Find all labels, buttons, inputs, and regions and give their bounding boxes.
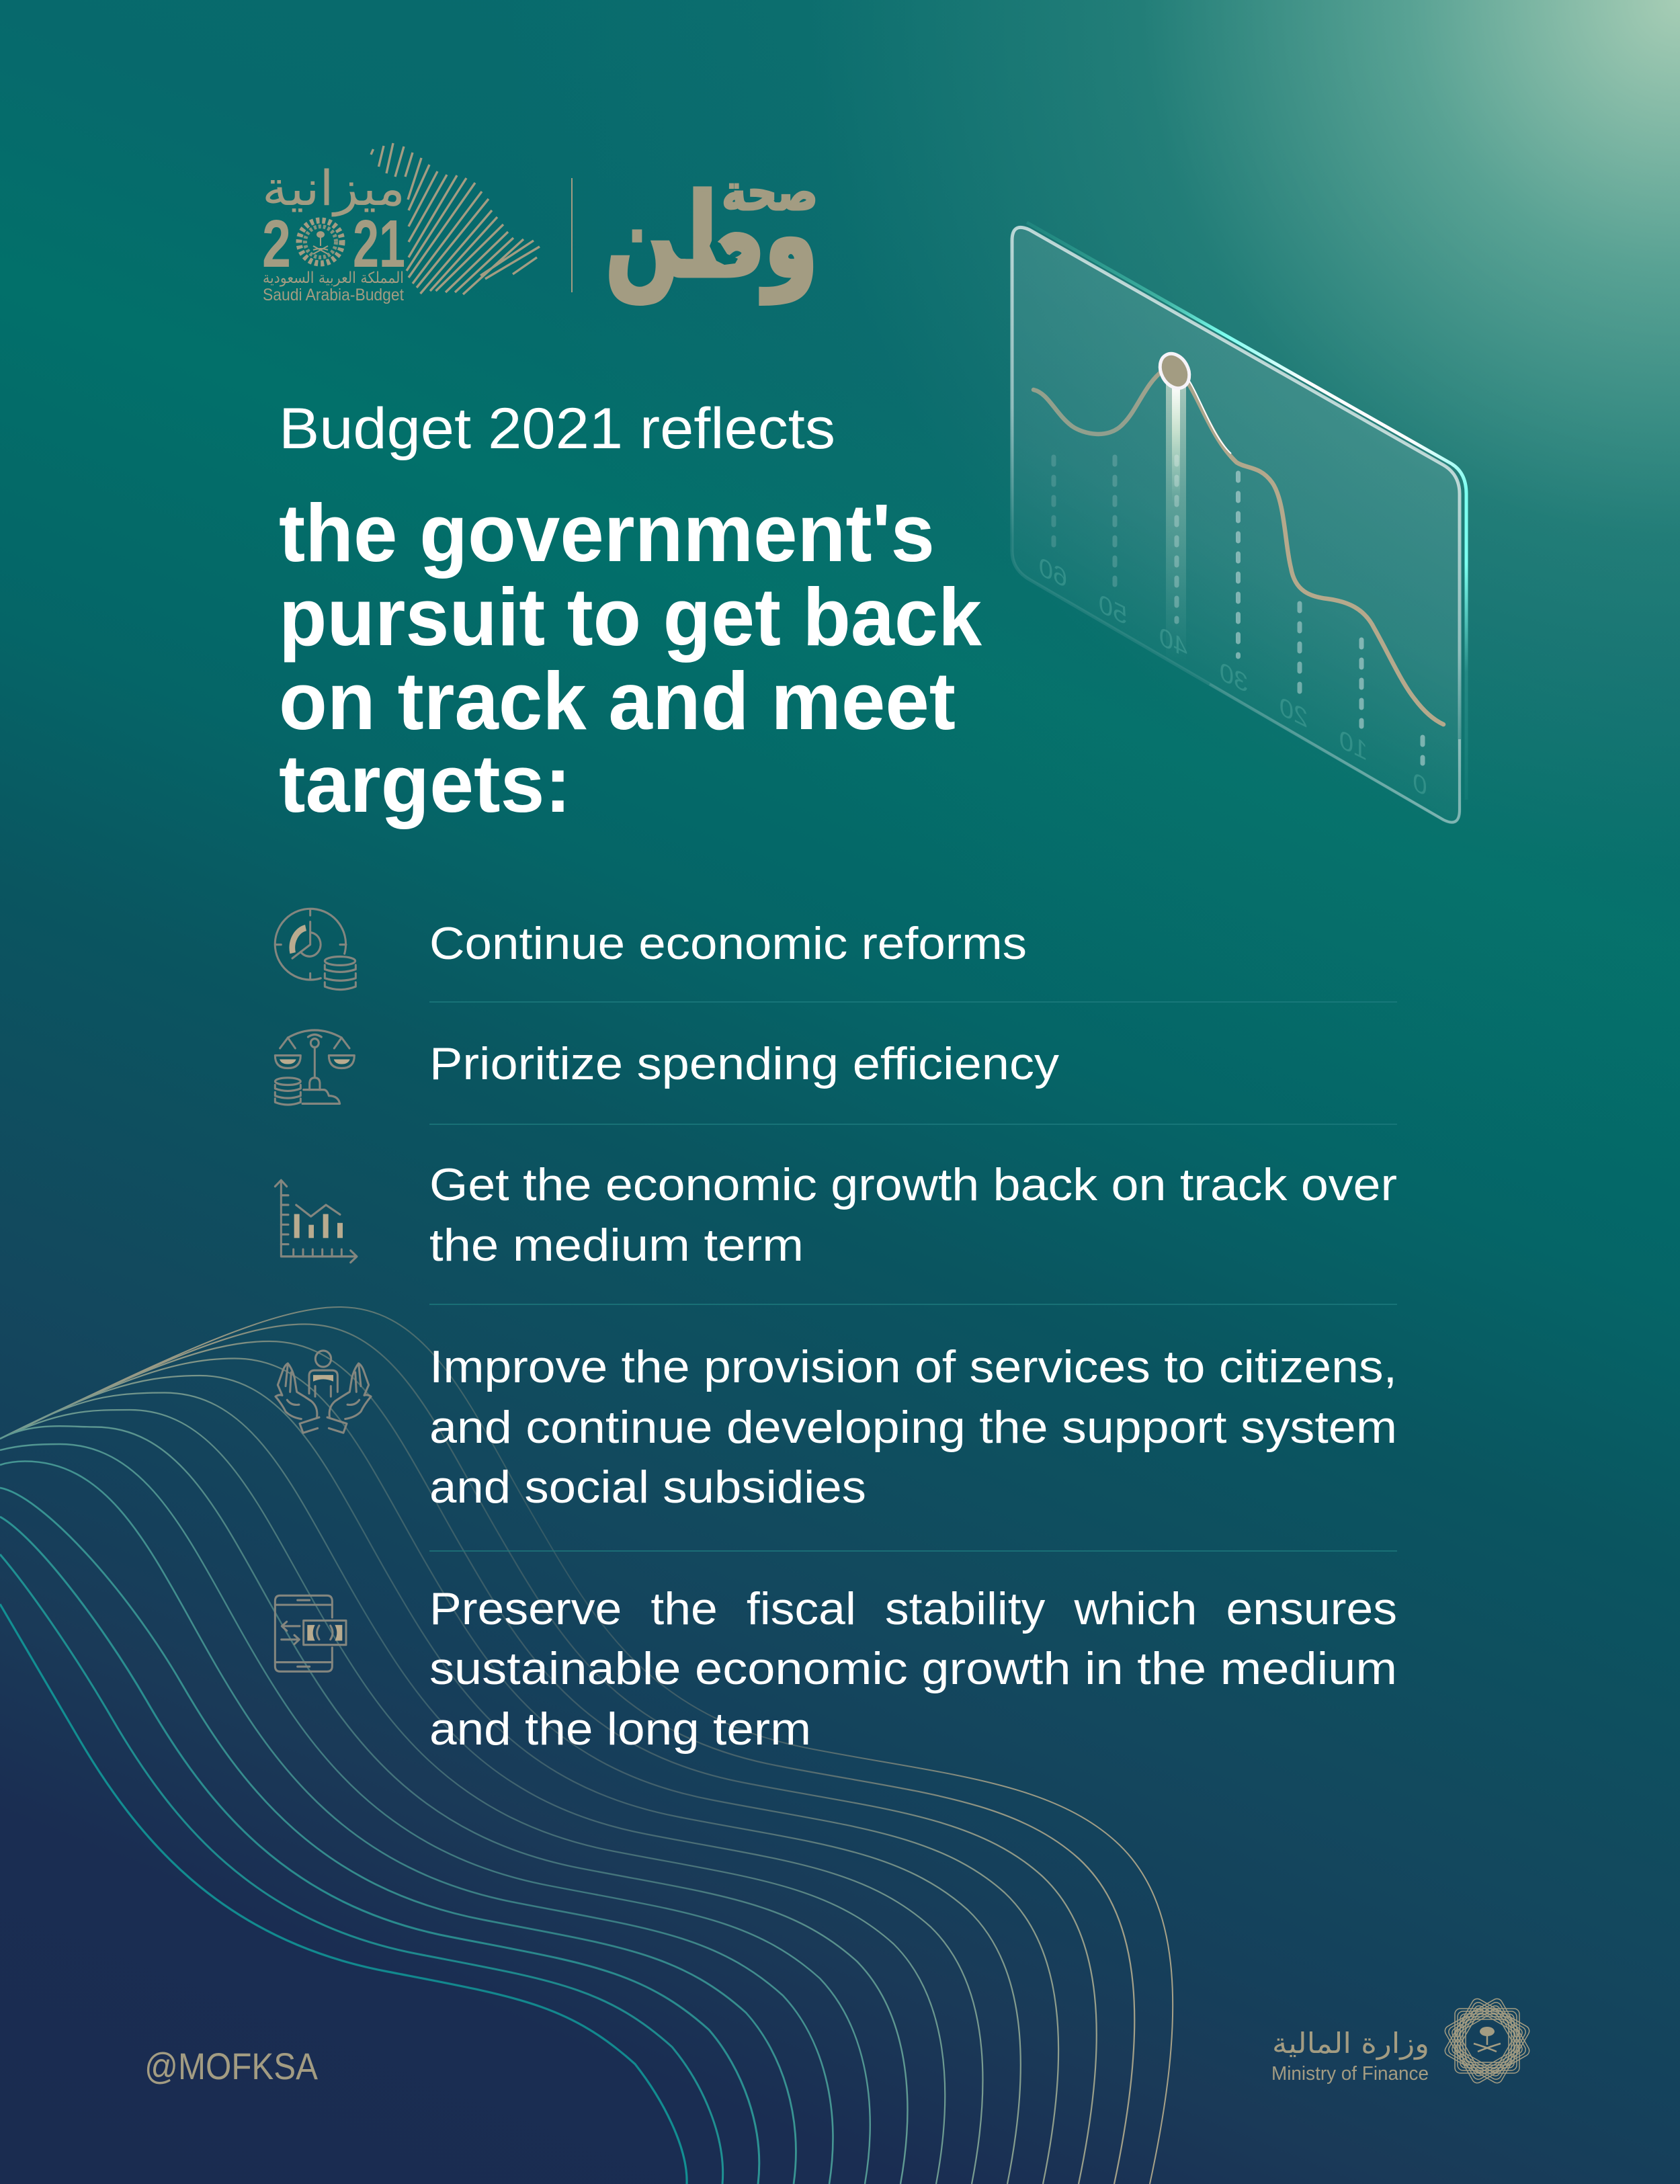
mirrored axis numbers: 30 bbox=[1220, 656, 1248, 699]
cyan glass edge bbox=[1027, 222, 1466, 800]
item 1 bbox=[275, 909, 1027, 990]
map cutout bbox=[710, 239, 738, 265]
mirrored axis numbers: 0 bbox=[1413, 767, 1427, 802]
headline bbox=[279, 487, 982, 829]
text: Preserve the fiscal stability which ensures bbox=[429, 1583, 1397, 1634]
chart panel bbox=[1012, 222, 1466, 823]
mirrored axis numbers: 50 bbox=[1099, 588, 1127, 631]
item 4 bbox=[276, 1341, 1397, 1513]
text: Prioritize spending efficiency bbox=[429, 1038, 1059, 1089]
text: Continue economic reforms bbox=[429, 918, 1027, 969]
icon: scale and coins bbox=[275, 1030, 354, 1105]
icon: gauge and coins bbox=[275, 909, 355, 990]
Arabic ministry name: وزارة المالية bbox=[1272, 2027, 1429, 2060]
mirrored axis numbers: 40 bbox=[1159, 621, 1187, 664]
Arabic word: sehat: صحة bbox=[722, 164, 818, 222]
icon: hands and citizen bbox=[276, 1351, 371, 1433]
social handle: @MOFKSA bbox=[144, 2045, 319, 2087]
map line fan bbox=[371, 143, 540, 294]
English logo caption: Saudi Arabia-Budget bbox=[263, 286, 404, 304]
peak marker bbox=[1154, 349, 1195, 393]
mirrored axis numbers bbox=[1039, 551, 1427, 802]
Arabic word: watan: وطن bbox=[605, 170, 818, 304]
curve highlight bbox=[1189, 381, 1231, 454]
logo: Sehat Watan bbox=[605, 164, 818, 304]
headline: the government's bbox=[279, 487, 935, 579]
intro line: Budget 2021 reflects bbox=[279, 396, 835, 461]
text: and social subsidies bbox=[429, 1462, 866, 1513]
glow column bbox=[1166, 382, 1186, 663]
text: the medium term bbox=[429, 1220, 804, 1271]
text: and the long term bbox=[429, 1704, 811, 1755]
item 2 bbox=[275, 1030, 1059, 1105]
lower glass edge bbox=[1210, 684, 1460, 823]
text bbox=[429, 1159, 1397, 1271]
rosette emblem bbox=[1443, 1997, 1531, 2085]
item 3 bbox=[275, 1159, 1397, 1271]
mirrored axis numbers: 20 bbox=[1279, 691, 1308, 734]
text bbox=[429, 1341, 1397, 1513]
wave lines bbox=[0, 1307, 1173, 2184]
year 21: 21 bbox=[353, 206, 405, 282]
mirrored axis numbers: 60 bbox=[1039, 551, 1067, 594]
mirrored axis numbers: 10 bbox=[1339, 724, 1368, 767]
text bbox=[429, 1583, 1397, 1755]
icon: phone and banknote bbox=[275, 1595, 346, 1671]
headline: pursuit to get back bbox=[279, 571, 982, 663]
icon: growth chart bbox=[275, 1180, 357, 1263]
year 2: 2 bbox=[262, 206, 291, 282]
logo: Ministry of Finance bbox=[1271, 1997, 1531, 2085]
Arabic word: budget: ميزانية bbox=[262, 160, 405, 217]
Arabic kingdom name: المملكة العربية السعودية bbox=[263, 269, 404, 287]
text: Improve the provision of services to citizens, bbox=[429, 1341, 1397, 1392]
headline: on track and meet bbox=[279, 655, 956, 747]
glass panel bbox=[1012, 227, 1460, 823]
text: Get the economic growth back on track over bbox=[429, 1159, 1397, 1210]
text: and continue developing the support system bbox=[429, 1402, 1397, 1453]
English ministry name: Ministry of Finance bbox=[1271, 2063, 1429, 2085]
logo divider bbox=[571, 178, 573, 292]
emblem in year bbox=[299, 220, 342, 263]
text: sustainable economic growth in the medium bbox=[429, 1643, 1397, 1694]
logo: Saudi Arabia Budget 2021 bbox=[262, 143, 540, 304]
dashed guide lines bbox=[1054, 457, 1423, 763]
item 5 bbox=[275, 1583, 1397, 1755]
line curve bbox=[1034, 371, 1443, 724]
headline: targets: bbox=[279, 738, 571, 829]
